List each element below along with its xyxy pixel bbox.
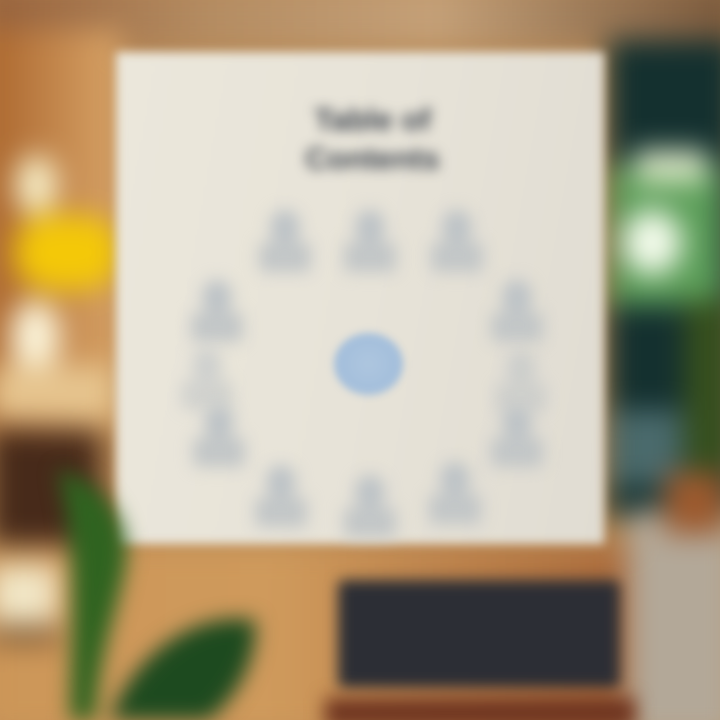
left wall: pale lower section xyxy=(0,365,115,420)
node 8 xyxy=(187,402,251,474)
node 6 xyxy=(178,348,236,412)
left wall: upper light xyxy=(15,155,57,215)
central hub: blue circle xyxy=(334,333,403,395)
right side: plant xyxy=(685,300,720,470)
poster: white board xyxy=(116,52,604,544)
right side: teal panel xyxy=(612,410,682,485)
tabletop xyxy=(0,545,640,720)
node 9 xyxy=(486,404,548,473)
node 11 xyxy=(338,470,402,546)
left wall: warm wood xyxy=(0,30,120,430)
left side: cream box xyxy=(0,565,58,623)
node 2 xyxy=(338,205,402,278)
node 10 xyxy=(249,460,313,534)
left side: dark shelf line xyxy=(0,628,60,642)
plant lower leaf xyxy=(110,619,255,720)
right side: white light xyxy=(622,210,682,275)
right side: dark window xyxy=(608,40,720,520)
left side: dark furniture xyxy=(0,430,100,560)
right side: green glow xyxy=(612,165,720,305)
ceiling: wood beam xyxy=(0,0,720,48)
keyboard: dark panel on desk xyxy=(338,580,620,688)
node 12 xyxy=(423,458,486,530)
left wall: yellow lamp glow xyxy=(15,215,120,290)
heading: poster title: Table of Contents xyxy=(305,102,440,176)
node 7 xyxy=(493,350,548,412)
diagram: ring of nodes xyxy=(178,205,548,546)
node 5 xyxy=(486,276,548,348)
node 3 xyxy=(425,205,488,278)
lower right: grey surface xyxy=(628,510,720,720)
right side: pale upper light xyxy=(635,150,707,182)
node 4 xyxy=(185,274,249,348)
node 1 xyxy=(253,205,317,278)
right side: terracotta pot xyxy=(665,472,720,534)
plant stem leaf xyxy=(58,470,127,720)
left wall: lower light xyxy=(10,300,60,375)
desk edge: dark red base xyxy=(325,698,635,720)
